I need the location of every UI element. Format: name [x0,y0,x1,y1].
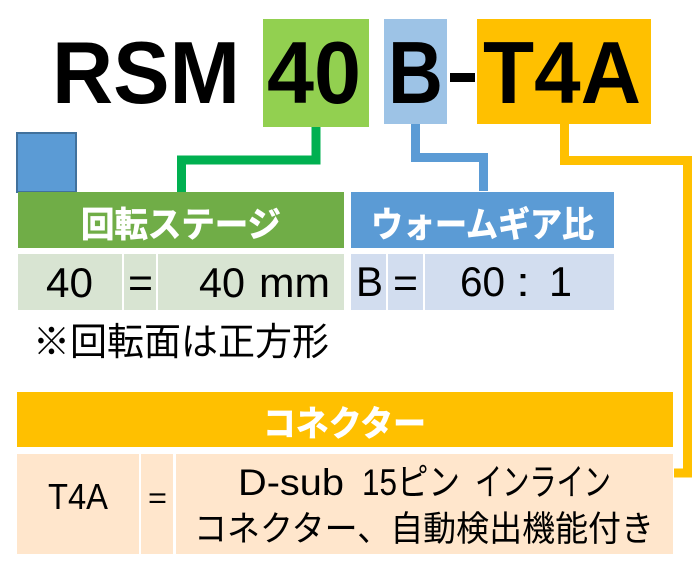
table row: B = 60:1: 1 [549,258,572,305]
note: rotating surface is square: ※回転面は正方形 [33,322,329,364]
panel: rotary stage [18,192,344,364]
table row: T4A description: 15ピン [362,462,460,503]
table row: 40 = 40 mm: 40 [46,259,93,306]
code box: B [384,19,447,124]
table row: T4A description: = [148,482,167,515]
panel: connector [17,392,673,554]
arrow: green connector [182,127,316,192]
title: model code [52,19,651,127]
table row: 40 = 40 mm: 40 [199,259,245,306]
table row: 40 = 40 mm [18,254,344,310]
code box: T4A [477,19,651,124]
table row: T4A description [17,454,673,554]
table row: T4A description: コネクター、自動検出機能付き [194,510,654,549]
arrow: blue connector [416,124,484,191]
heading: worm gear ratio [351,192,614,248]
table row: B = 60:1: B [356,258,383,305]
heading: connector [17,392,673,447]
table row: T4A description: インライン [475,462,611,503]
title: model code: RSM [52,23,240,122]
title: model code: 40 [267,23,361,122]
title: model code: B [388,23,443,122]
panel: worm gear ratio [351,192,614,310]
table row: 40 = 40 mm: = [128,259,153,306]
panel: connector: コネクター [263,405,426,444]
panel: rotary stage: 回転ステージ [81,206,281,245]
panel: worm gear ratio: ウォームギア比 [371,206,594,245]
title: model code: T4A [483,23,641,122]
code box: 40 [263,19,369,127]
table row: T4A description: T4A [48,476,108,517]
table row: B = 60:1: = [393,259,418,306]
icon: blue square [17,133,76,192]
table row: B = 60:1 [351,254,614,310]
table row: B = 60:1: : [516,258,530,305]
table row: B = 60:1: 60 [460,258,505,305]
table row: 40 = 40 mm: mm [259,259,330,306]
table row: T4A description: D-sub [238,462,344,503]
heading: rotary stage [18,192,344,248]
arrow: yellow connector [564,124,688,473]
